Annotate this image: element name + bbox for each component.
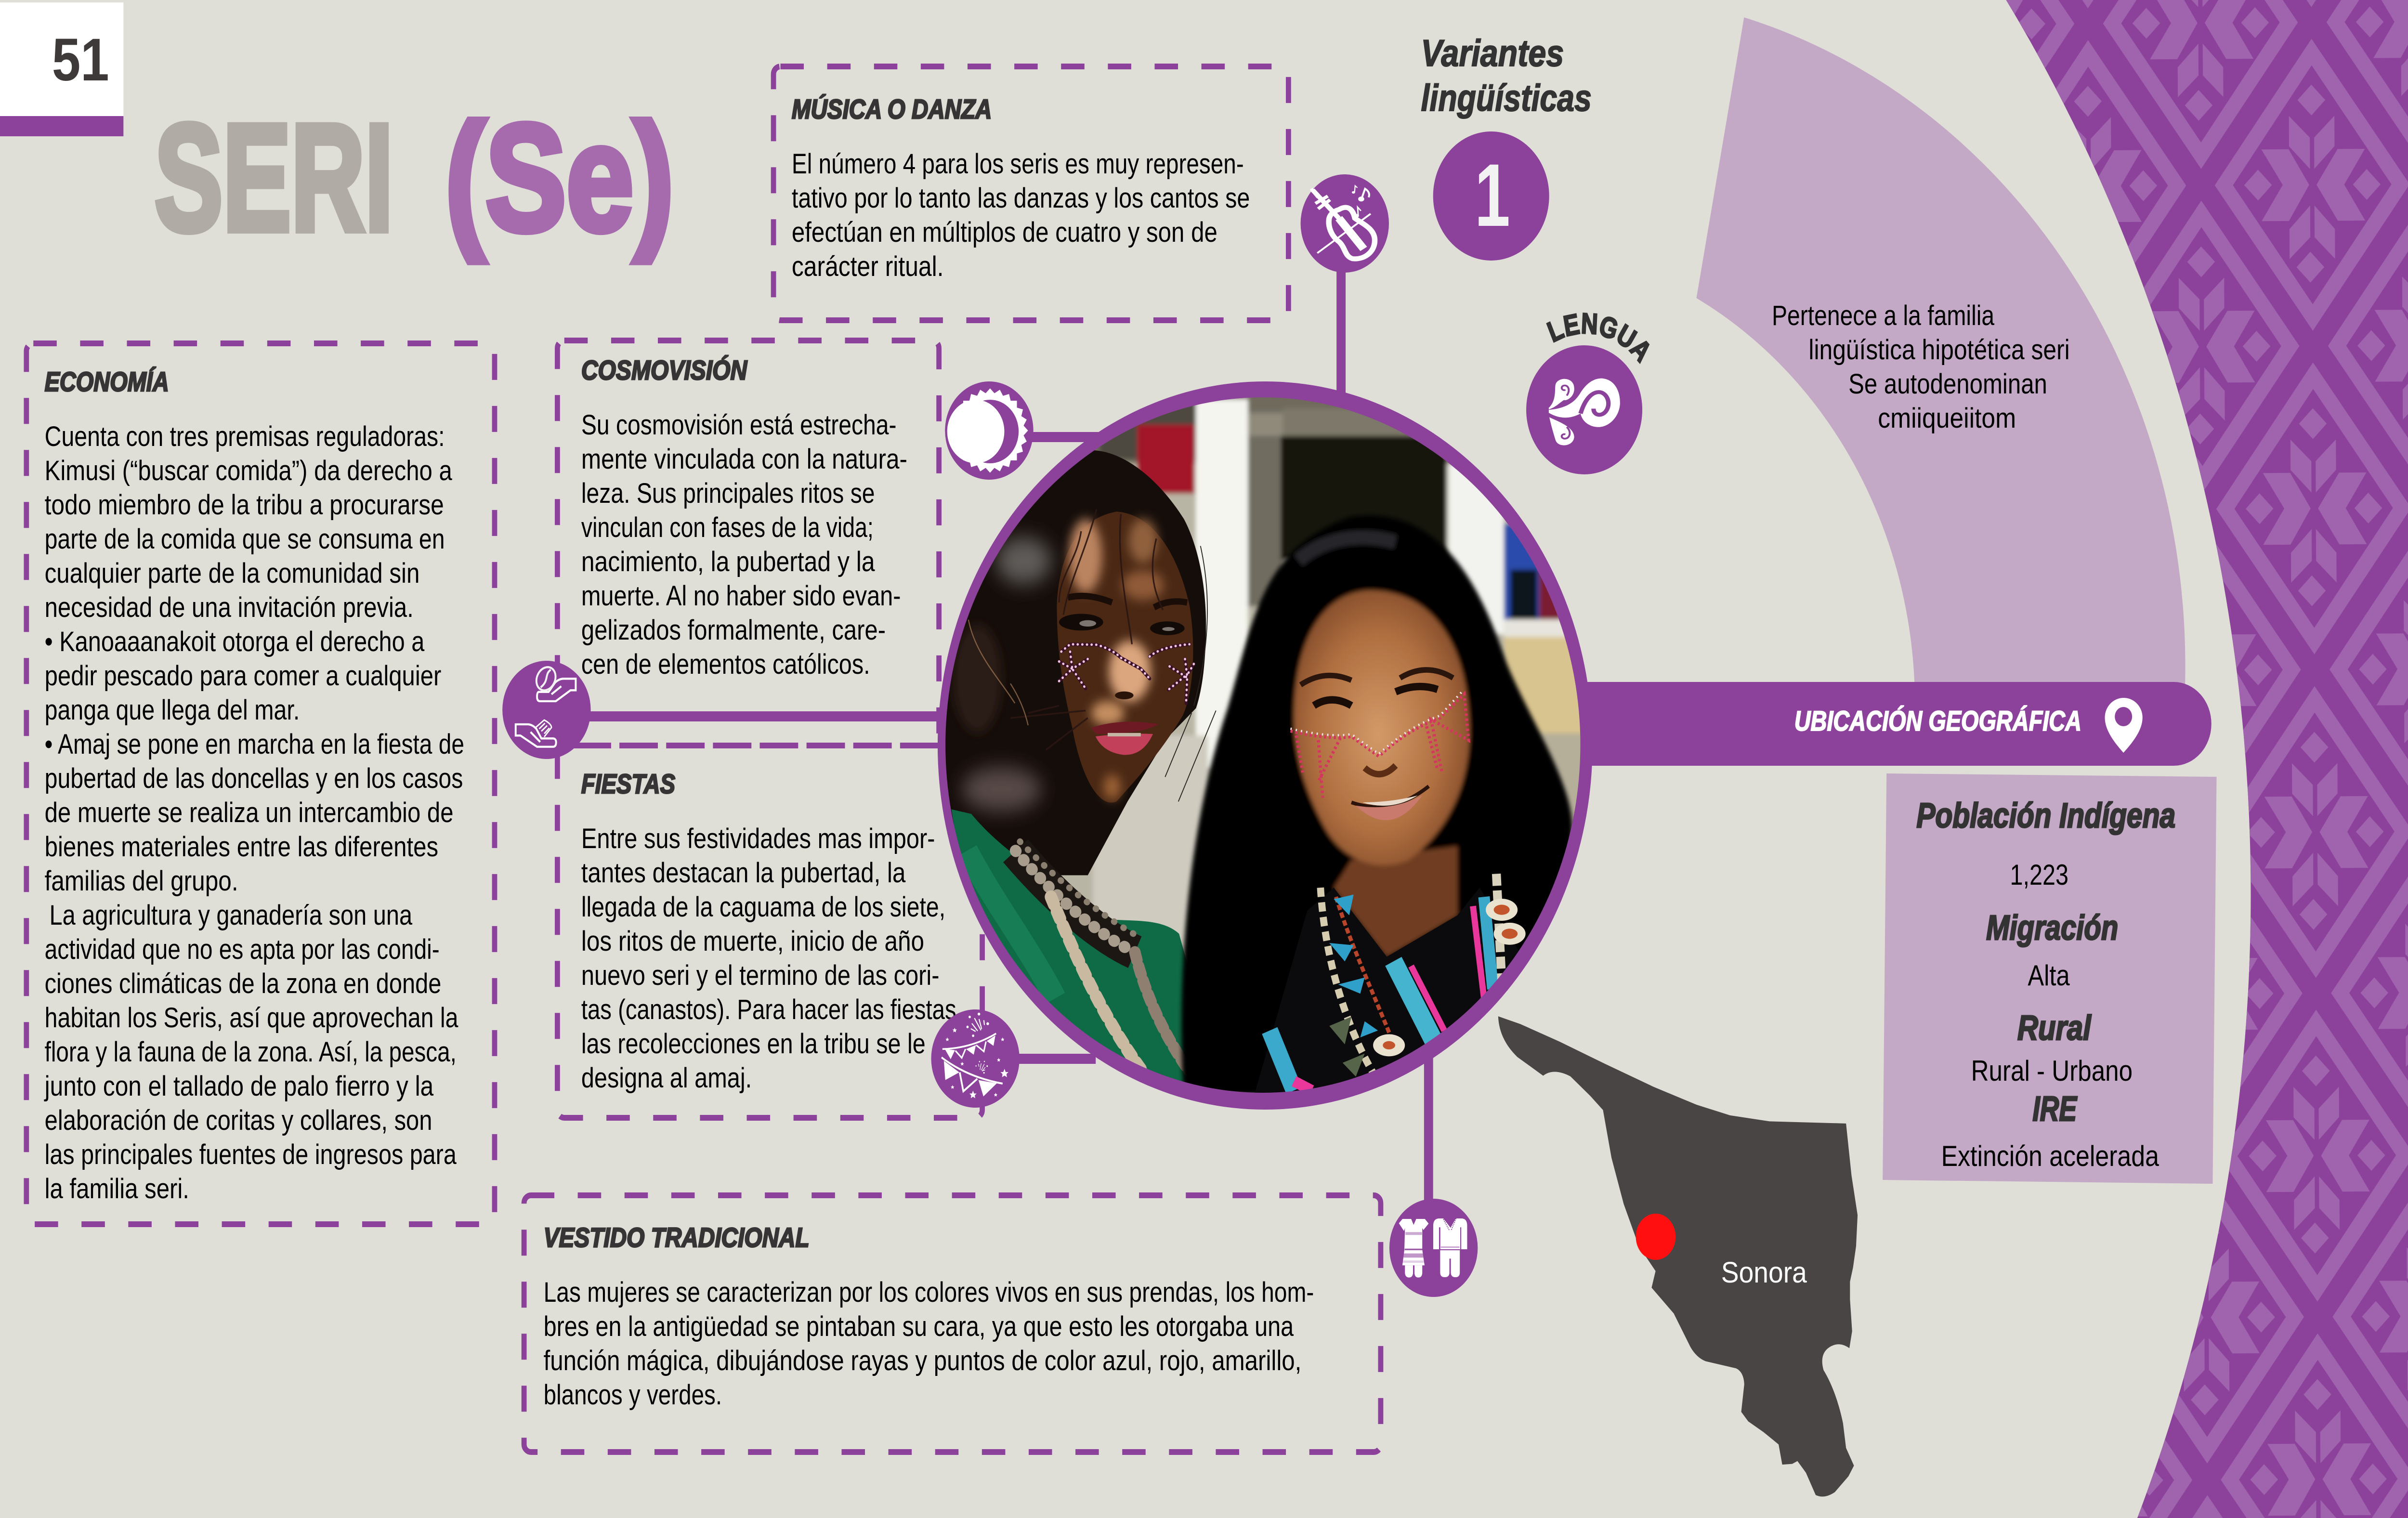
- text: lengua description: [1772, 300, 2070, 434]
- location marker: [1636, 1214, 1675, 1260]
- icon: música violin: [1301, 174, 1389, 273]
- heading: música o danza: MÚSICA O DANZA: [792, 94, 992, 125]
- map of Sonora: [1498, 1016, 1858, 1497]
- text: música o danza: tativo por lo tanto las danzas y los cantos se: [792, 182, 1250, 214]
- heading: lengua on arc: LENGUA: [1546, 313, 1650, 364]
- left woman: green garment and necklaces: [952, 809, 1223, 1095]
- text: vestido tradicional: blancos y verdes.: [544, 1379, 722, 1411]
- text: economía: La agricultura y ganadería son una: [50, 899, 412, 931]
- text: música o danza: El número 4 para los seris es muy represen-: [792, 148, 1244, 180]
- text: economía: todo miembro de la tribu a procurarse: [45, 489, 444, 521]
- central photo: two Seri women: [945, 397, 1581, 1093]
- left woman: face paint: [1059, 644, 1194, 703]
- text: fiestas: Entre sus festividades mas impor-: [581, 823, 935, 854]
- text: música o danza: [792, 148, 1250, 282]
- variantes count badge: 1: [1475, 146, 1510, 245]
- heading: variantes lingüísticas: lingüísticas: [1421, 77, 1592, 119]
- text: vestido tradicional: bres en la antigüedad se pintaban su cara, ya que esto les otorgaba una: [544, 1310, 1294, 1342]
- right woman: blouse stripes and necklaces: [1254, 874, 1537, 1095]
- text: cosmovisión: leza. Sus principales ritos se: [581, 477, 875, 509]
- panel: vestido tradicional: [524, 1195, 1381, 1452]
- text: vestido tradicional: Las mujeres se caracterizan por los colores vivos en sus prendas, los hom-: [544, 1276, 1314, 1308]
- panel: población indígena: Población Indígena: [1916, 796, 2175, 835]
- text: cosmovisión: [581, 409, 907, 680]
- page number tab: [0, 2, 123, 136]
- text: fiestas: [581, 823, 956, 1094]
- text: economía: • Kanoaaanakoit otorga el derecho a: [45, 626, 425, 657]
- text: fiestas: llegada de la caguama de los siete,: [581, 891, 945, 923]
- heading: cosmovisión: COSMOVISIÓN: [581, 355, 748, 386]
- icon: economía hands: [502, 661, 591, 759]
- heading: variantes lingüísticas: [1421, 32, 1592, 119]
- panel: población indígena: 1,223: [2010, 859, 2068, 891]
- left woman: hair and face: [944, 450, 1216, 875]
- text: economía: ciones climáticas de la zona en donde: [45, 968, 441, 999]
- text: lengua description: lingüística hipotética seri: [1808, 334, 2070, 366]
- heading: economía: ECONOMÍA: [45, 367, 169, 397]
- text: economía: Cuenta con tres premisas reguladoras:: [45, 420, 445, 452]
- text: fiestas: los ritos de muerte, inicio de año: [581, 925, 924, 957]
- text: cosmovisión: gelizados formalmente, care-: [581, 614, 886, 646]
- text: economía: [44, 420, 464, 1204]
- text: fiestas: nuevo seri y el termino de las cori-: [581, 959, 940, 991]
- text: cosmovisión: vinculan con fases de la vida;: [581, 511, 874, 543]
- photo ring: [938, 381, 1593, 1110]
- text: economía: de muerte se realiza un intercambio de: [45, 797, 454, 828]
- panel: población indígena: IRE: [2032, 1089, 2078, 1128]
- text: lengua description: cmiiqueiitom: [1878, 402, 2016, 434]
- connector lines: [585, 270, 1433, 1204]
- text: fiestas: tas (canastos). Para hacer las fiestas: [581, 994, 956, 1025]
- ubicación geográfica bar: UBICACIÓN GEOGRÁFICA: [1794, 705, 2081, 737]
- panel: población indígena: Migración: [1986, 908, 2118, 947]
- text: vestido tradicional: [544, 1276, 1314, 1411]
- text: economía: junto con el tallado de palo fierro y la: [44, 1070, 433, 1102]
- icon: fiestas bunting: [931, 1009, 1020, 1108]
- ubicación geográfica bar: [1581, 682, 2212, 766]
- panel: población indígena: Rural: [2017, 1008, 2092, 1047]
- text: economía: necesidad de una invitación previa.: [45, 591, 414, 623]
- title: [155, 92, 674, 263]
- heading: vestido tradicional: VESTIDO TRADICIONAL: [544, 1223, 810, 1253]
- text: economía: flora y la fauna de la zona. Así, la pesca,: [45, 1036, 457, 1068]
- text: fiestas: tantes destacan la pubertad, la: [581, 857, 906, 889]
- title: SERI: [155, 92, 393, 262]
- panel: economía: [26, 343, 495, 1224]
- panel: población indígena: Extinción acelerada: [1941, 1140, 2159, 1173]
- text: economía: las principales fuentes de ingresos para: [45, 1138, 457, 1170]
- text: cosmovisión: muerte. Al no haber sido evan-: [581, 580, 901, 612]
- text: música o danza: efectúan en múltiplos de cuatro y son de: [792, 216, 1217, 248]
- map label: Sonora: [1721, 1256, 1807, 1289]
- text: economía: bienes materiales entre las diferentes: [45, 831, 438, 863]
- panel: población indígena: Alta: [2028, 959, 2070, 992]
- text: economía: pubertad de las doncellas y en los casos: [45, 762, 463, 794]
- icon: lengua swirl: [1526, 345, 1642, 474]
- text: economía: elaboración de coritas y collares, son: [45, 1104, 432, 1136]
- text: cosmovisión: cen de elementos católicos.: [581, 648, 870, 680]
- text: economía: panga que llega del mar.: [45, 694, 300, 726]
- icon: location pin: [2105, 698, 2143, 753]
- text: fiestas: las recolecciones en la tribu se le: [581, 1028, 926, 1060]
- variantes count badge: [1433, 131, 1549, 261]
- text: economía: actividad que no es apta por las condi-: [45, 933, 440, 965]
- panel: población indígena: Rural - Urbano: [1971, 1055, 2133, 1087]
- text: cosmovisión: nacimiento, la pubertad y la: [581, 546, 875, 577]
- lengua arc panel: [1696, 17, 2186, 689]
- panel: cosmovisión: [557, 340, 939, 746]
- panel: población indígena: [1883, 773, 2217, 1184]
- right woman: hair and face: [1181, 515, 1572, 1095]
- text: fiestas: designa al amaj.: [581, 1062, 752, 1094]
- heading: fiestas: FIESTAS: [581, 769, 675, 799]
- text: vestido tradicional: función mágica, dibujándose rayas y puntos de color azul, rojo, amarillo,: [544, 1345, 1301, 1376]
- text: economía: Kimusi (“buscar comida”) da derecho a: [45, 455, 452, 486]
- text: lengua description: Pertenece a la familia: [1772, 300, 1994, 331]
- heading: variantes lingüísticas: Variantes: [1421, 32, 1564, 74]
- text: música o danza: carácter ritual.: [792, 250, 944, 282]
- woven pattern band on the right: [2006, 0, 2408, 1518]
- text: economía: habitan los Seris, así que aprovechan la: [45, 1002, 458, 1034]
- text: cosmovisión: Su cosmovisión está estrecha-: [581, 409, 897, 441]
- text: economía: parte de la comida que se consuma en: [45, 523, 445, 555]
- icon: cosmovisión sun and moon: [945, 381, 1034, 480]
- text: lengua description: Se autodenominan: [1848, 368, 2047, 400]
- text: cosmovisión: mente vinculada con la natura-: [581, 443, 907, 475]
- text: economía: familias del grupo.: [45, 865, 238, 897]
- icon: vestido dress and suit: [1389, 1199, 1478, 1297]
- panel: música o danza: [773, 66, 1288, 320]
- text: economía: pedir pescado para comer a cualquier: [45, 660, 441, 692]
- page number tab: 51: [52, 26, 109, 93]
- title: (Se): [445, 92, 674, 263]
- text: economía: la familia seri.: [45, 1173, 189, 1204]
- right woman: features: [1290, 670, 1468, 820]
- panel: fiestas: [557, 746, 982, 1118]
- text: economía: cualquier parte de la comunidad sin: [45, 557, 419, 589]
- text: economía: • Amaj se pone en marcha en la fiesta de: [45, 728, 464, 760]
